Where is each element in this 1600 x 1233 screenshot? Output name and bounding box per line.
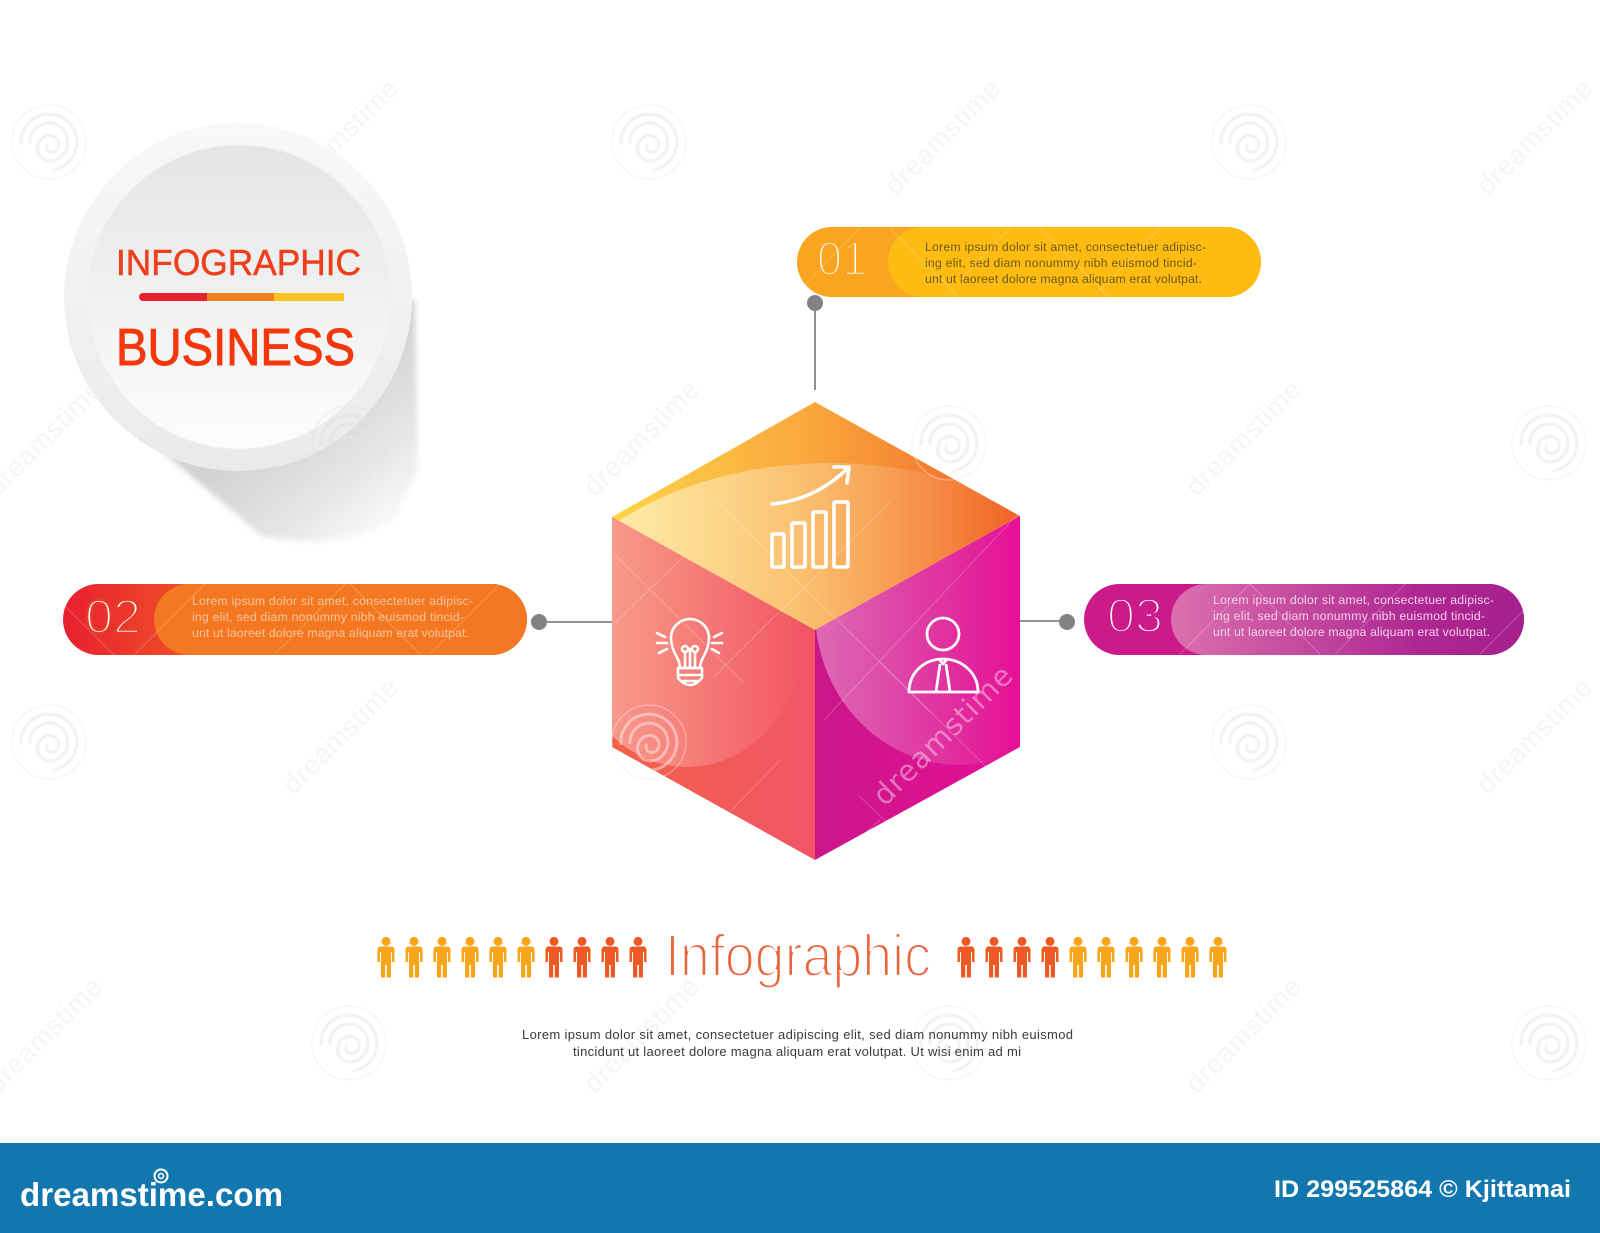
text: dreamstime <box>578 374 706 502</box>
badge inner disc <box>87 145 391 449</box>
connector: step 02 <box>531 614 612 630</box>
step 03 text: Lorem ipsum dolor sit amet, consectetuer adipisc- <box>1213 593 1494 607</box>
text: dreamstime <box>1471 672 1599 800</box>
connector: step 01 <box>807 295 823 390</box>
heading: infographic: Infographic <box>665 923 931 989</box>
step 03 text: unt ut laoreet dolore magna aliquam erat volutpat. <box>1213 625 1490 639</box>
badge heading: infographic: INFOGRAPHIC <box>116 242 361 283</box>
step 02 text: Lorem ipsum dolor sit amet, consectetuer adipisc- <box>192 594 473 608</box>
number 01: 01 <box>817 233 867 286</box>
title badge <box>64 123 418 541</box>
number 03: 03 <box>1107 590 1163 643</box>
footer logo: dreamstime.com <box>20 1176 283 1213</box>
icon: business person <box>909 618 978 692</box>
number 02: 02 <box>85 591 141 644</box>
panel: step 03 pill <box>1084 584 1524 655</box>
footer banner <box>0 1143 1600 1233</box>
step 02 text: unt ut laoreet dolore magna aliquam erat volutpat. <box>192 626 469 640</box>
hexagonal cube <box>612 402 1020 860</box>
cube right face <box>815 516 1020 860</box>
step 02 text: ing elit, sed diam nonummy nibh euismod tincid- <box>192 610 464 624</box>
people row: left <box>378 937 646 978</box>
body text: Lorem ipsum dolor sit amet, consectetuer adipiscing elit, sed diam nonummy nibh euismod <box>522 1027 1073 1042</box>
text: dreamstime <box>578 971 706 1099</box>
step 01 text: ing elit, sed diam nonummy nibh euismod tincid- <box>925 256 1197 270</box>
icon: light bulb <box>657 619 722 685</box>
panel: step 01 pill <box>797 226 1261 298</box>
body text: tincidunt ut laoreet dolore magna aliquam erat volutpat. Ut wisi enim ad mi <box>573 1044 1021 1059</box>
connector: step 03 <box>1020 614 1075 630</box>
step 01 text: unt ut laoreet dolore magna aliquam erat volutpat. <box>925 272 1202 286</box>
text: dreamstime <box>277 672 405 800</box>
text: dreamstime <box>1471 73 1599 201</box>
icon: growth chart <box>772 467 849 567</box>
hexagonal cube: dreamstime <box>866 658 1020 812</box>
badge heading: business: BUSINESS <box>116 319 355 377</box>
step 01 text: Lorem ipsum dolor sit amet, consectetuer adipisc- <box>925 240 1206 254</box>
text: dreamstime <box>277 73 405 201</box>
people row: right <box>958 937 1226 978</box>
text: dreamstime <box>1180 374 1308 502</box>
step 03 text: ing elit, sed diam nonummy nibh euismod tincid- <box>1213 609 1485 623</box>
panel: step 02 pill <box>63 584 527 656</box>
cube left face <box>612 517 815 860</box>
cube top face <box>612 402 1020 630</box>
text: dreamstime <box>879 73 1007 201</box>
footer image id and author: ID 299525864 © Kjittamai <box>1274 1176 1571 1203</box>
badge tricolour rule <box>139 293 344 301</box>
badge outer disc <box>64 123 412 471</box>
badge long shadow <box>157 300 418 541</box>
text: dreamstime <box>1180 971 1308 1099</box>
